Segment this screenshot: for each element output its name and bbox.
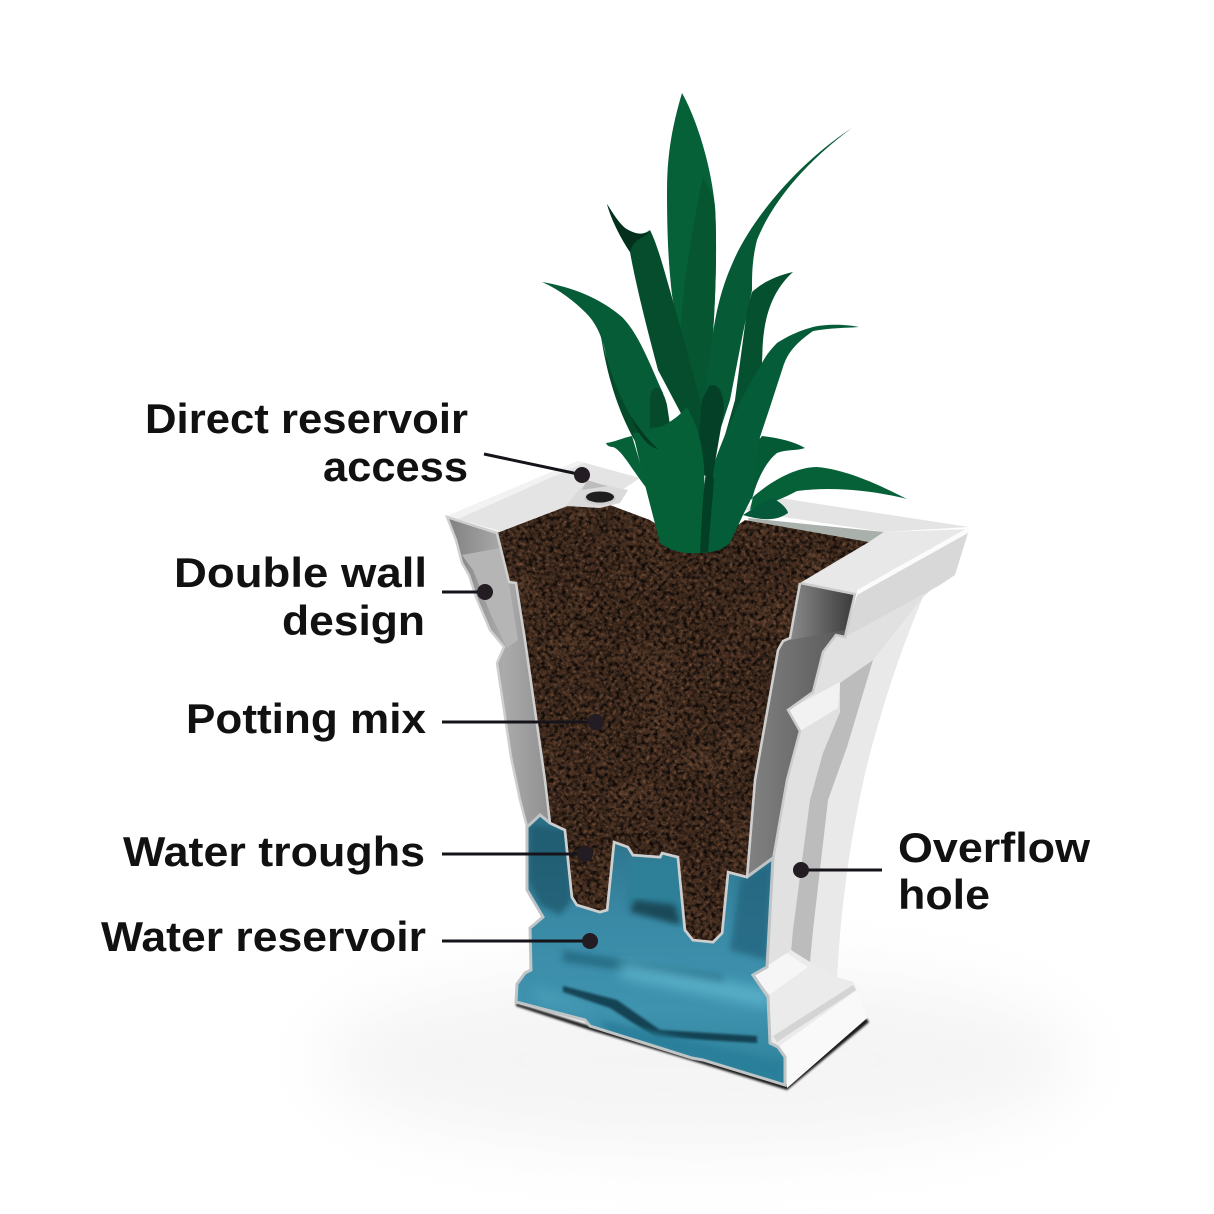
callout: overflow hole: Overflow bbox=[898, 824, 1090, 871]
water reservoir bbox=[516, 815, 785, 1085]
leaf: overlap stub bbox=[650, 388, 670, 428]
callout: direct reservoir access: access bbox=[323, 443, 468, 490]
callout: water troughs: Water troughs bbox=[123, 828, 425, 875]
ground shadow bbox=[320, 970, 1080, 1150]
callout: water reservoir bbox=[101, 913, 598, 960]
leaf: far left bbox=[542, 282, 670, 470]
contact shadow bbox=[516, 1003, 869, 1090]
leaf: front left bbox=[633, 407, 704, 553]
potting mix soil bbox=[497, 505, 869, 942]
leaf: notched left bbox=[607, 204, 705, 440]
leaf: notched tip shade bbox=[607, 204, 650, 252]
leaf: right middle bbox=[700, 325, 859, 553]
callout: overflow hole bbox=[793, 824, 1090, 918]
icon: reservoir access opening bbox=[566, 480, 628, 508]
leaf: center tall shade bbox=[680, 177, 716, 430]
leaf: small left base bbox=[606, 436, 648, 490]
left double wall section bbox=[447, 517, 550, 827]
left wall inner detail bbox=[462, 548, 518, 648]
leaf: low right bump bbox=[743, 498, 788, 519]
callout: potting mix bbox=[186, 695, 604, 742]
rim front face bbox=[845, 533, 968, 637]
leaf: small right base bbox=[735, 436, 805, 500]
callout: potting mix: Potting mix bbox=[186, 695, 427, 742]
bracket kink bbox=[788, 682, 840, 731]
callout: double wall design: design bbox=[282, 597, 425, 644]
right outer strip bbox=[810, 597, 923, 977]
callout: water troughs bbox=[123, 828, 593, 875]
rim top surface bbox=[447, 461, 969, 596]
leaf: front center bbox=[700, 460, 714, 553]
right body face bbox=[753, 578, 945, 1088]
recessed panel bbox=[791, 660, 873, 962]
leaf: upper right small bbox=[715, 272, 793, 470]
plant bbox=[542, 93, 907, 553]
water shading streaks bbox=[528, 825, 572, 915]
leaf: far left shade bbox=[600, 330, 657, 450]
leaf: front shadow curve bbox=[630, 415, 658, 449]
leaf: center tall bbox=[667, 93, 716, 430]
callout: double wall design: Double wall bbox=[174, 549, 427, 596]
planter cutaway bbox=[447, 461, 969, 1090]
leaf: far right long bbox=[695, 128, 852, 470]
callout: water reservoir: Water reservoir bbox=[101, 913, 426, 960]
leaf: inner shadow stem bbox=[696, 385, 724, 480]
callout: direct reservoir access bbox=[145, 395, 590, 490]
plinth bbox=[753, 950, 867, 1088]
leaf: low right long bbox=[750, 467, 907, 510]
callout: overflow hole: hole bbox=[898, 871, 990, 918]
callout: double wall design bbox=[174, 549, 493, 644]
right double wall section bbox=[747, 583, 855, 877]
callout: direct reservoir access: Direct reservoir bbox=[145, 395, 468, 442]
